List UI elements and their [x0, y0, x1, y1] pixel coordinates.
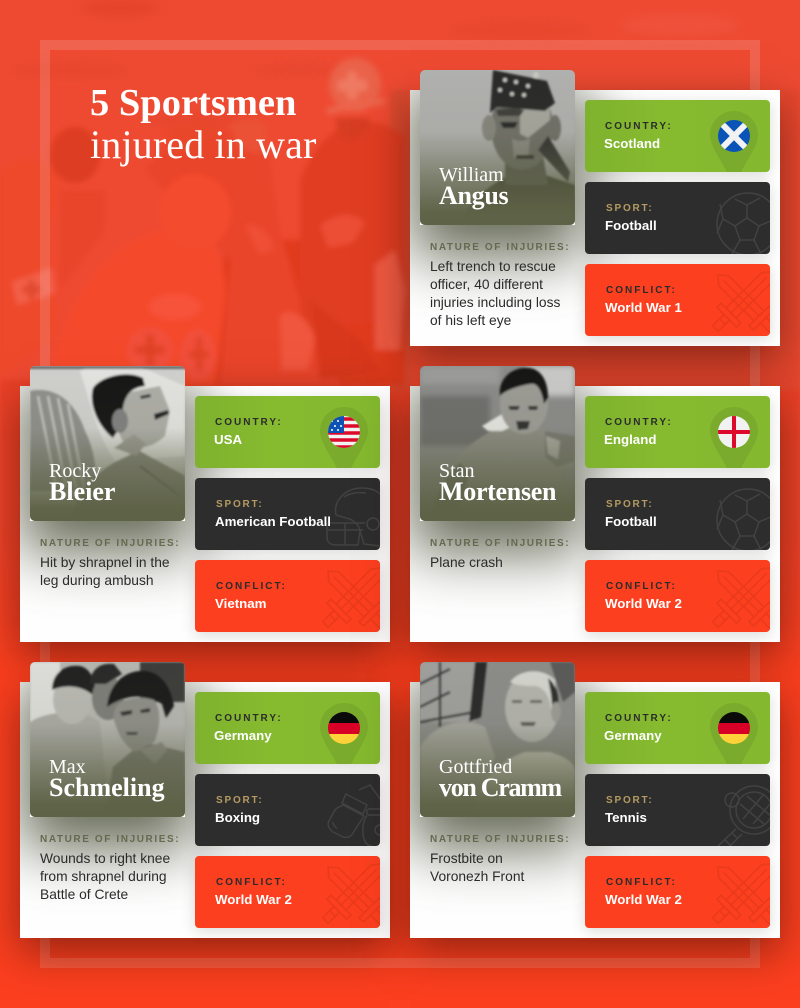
photo: William Angus	[420, 70, 575, 225]
label: SPORT:	[216, 795, 263, 806]
value: Tennis	[605, 810, 647, 825]
tile: country	[195, 692, 380, 764]
tile: conflict	[585, 264, 770, 336]
injuries label: NATURE OF INJURIES:	[40, 538, 180, 549]
label: CONFLICT:	[606, 877, 677, 888]
label: COUNTRY:	[215, 713, 283, 724]
injuries text: Wounds to right knee	[40, 851, 170, 866]
title: injured in war	[90, 122, 316, 167]
name	[439, 756, 562, 802]
card: Stan Mortensen	[378, 366, 800, 682]
value: Scotland	[604, 136, 660, 151]
lower scene base	[0, 380, 800, 700]
name: von Cramm	[439, 773, 561, 802]
icon: England flag pin	[710, 407, 758, 468]
ground	[215, 240, 405, 385]
injuries text: Plane crash	[430, 555, 503, 570]
label: COUNTRY:	[605, 417, 673, 428]
value: Germany	[214, 728, 272, 743]
label: CONFLICT:	[216, 581, 287, 592]
icon: Scotland flag pin	[710, 111, 758, 172]
icon: USA flag pin	[320, 407, 368, 468]
injuries label: NATURE OF INJURIES:	[430, 242, 570, 253]
value: Football	[605, 514, 657, 529]
name: Angus	[439, 181, 508, 210]
name: Stan	[439, 460, 475, 482]
left man	[0, 159, 60, 380]
icon: crossed swords	[712, 272, 770, 334]
value: American Football	[215, 514, 331, 529]
value: World War 2	[605, 892, 682, 907]
name	[49, 460, 115, 506]
name: Bleier	[49, 477, 115, 506]
tile: country	[195, 396, 380, 468]
injuries text	[40, 555, 170, 588]
photo: Max Schmeling	[30, 662, 185, 817]
tile: conflict	[195, 856, 380, 928]
icon: crossed swords	[712, 864, 770, 926]
center soldier	[145, 130, 340, 385]
value: Vietnam	[215, 596, 266, 611]
name: William	[439, 164, 504, 186]
card: Gottfried von Cramm	[378, 662, 800, 982]
name: Gottfried	[439, 756, 512, 778]
icon: boxing gloves	[328, 784, 380, 846]
label: COUNTRY:	[605, 713, 673, 724]
card: Rocky Bleier	[0, 366, 413, 682]
label: SPORT:	[606, 203, 653, 214]
tile: country	[585, 692, 770, 764]
injuries text: leg during ambush	[40, 573, 154, 588]
label: COUNTRY:	[215, 417, 283, 428]
tile: sport	[195, 774, 380, 846]
label: SPORT:	[216, 499, 263, 510]
photo: Rocky Bleier	[30, 366, 185, 521]
name	[439, 460, 556, 506]
injuries text: of his left eye	[430, 313, 511, 328]
tile: sport	[195, 478, 380, 550]
icon: Germany flag pin	[320, 703, 368, 764]
label: SPORT:	[606, 795, 653, 806]
icon: football	[716, 488, 770, 550]
background photo: medics treating a soldier	[0, 0, 800, 590]
photo: Gottfried von Cramm	[420, 662, 575, 817]
injuries text: Left trench to rescue	[430, 259, 556, 274]
injuries text	[430, 259, 560, 328]
label: CONFLICT:	[606, 285, 677, 296]
value: World War 2	[215, 892, 292, 907]
hands and lower right	[280, 313, 315, 370]
icon: crossed swords	[322, 568, 380, 630]
icon: crossed swords	[322, 864, 380, 926]
icon: football	[716, 192, 770, 254]
patches	[149, 294, 201, 320]
icon: tennis racket	[717, 785, 770, 846]
injuries text: injuries including loss	[430, 295, 560, 310]
tile: sport	[585, 478, 770, 550]
injuries text: from shrapnel during	[40, 869, 167, 884]
injuries text	[40, 851, 170, 902]
name	[439, 164, 508, 210]
injuries label: NATURE OF INJURIES:	[430, 538, 570, 549]
icon: Germany flag pin	[710, 703, 758, 764]
icon: football helmet	[326, 487, 380, 547]
tile: conflict	[195, 560, 380, 632]
value: Football	[605, 218, 657, 233]
name: Schmeling	[49, 773, 165, 802]
armband	[12, 268, 55, 305]
label: SPORT:	[606, 499, 653, 510]
tile: country	[585, 100, 770, 172]
value: England	[604, 432, 656, 447]
label: COUNTRY:	[605, 121, 673, 132]
injuries label: NATURE OF INJURIES:	[430, 834, 570, 845]
photo: Stan Mortensen	[420, 366, 575, 521]
name: Mortensen	[439, 477, 556, 506]
injuries text: Voronezh Front	[430, 869, 524, 884]
title	[90, 82, 316, 167]
value: World War 1	[605, 300, 682, 315]
tile: sport	[585, 182, 770, 254]
name: Max	[49, 756, 86, 778]
name	[49, 756, 165, 802]
injuries label: NATURE OF INJURIES:	[40, 834, 180, 845]
card: William Angus	[380, 70, 800, 386]
helmet	[329, 58, 381, 112]
injuries text: Frostbite on	[430, 851, 503, 866]
right soldier	[300, 122, 405, 330]
injuries text: officer, 40 different	[430, 277, 543, 292]
value: Boxing	[215, 810, 260, 825]
back man	[50, 229, 226, 385]
tile: country	[585, 396, 770, 468]
title: 5 Sportsmen	[90, 82, 296, 124]
value: USA	[214, 432, 242, 447]
value: Germany	[604, 728, 662, 743]
card: Max Schmeling	[0, 662, 414, 982]
tile: sport	[585, 774, 770, 846]
label: CONFLICT:	[606, 581, 677, 592]
tile: conflict	[585, 856, 770, 928]
value: World War 2	[605, 596, 682, 611]
injuries text	[430, 851, 524, 884]
icon: crossed swords	[712, 568, 770, 630]
injuries text: Battle of Crete	[40, 887, 128, 902]
name: Rocky	[49, 460, 101, 482]
injuries text: Hit by shrapnel in the	[40, 555, 170, 570]
tile: conflict	[585, 560, 770, 632]
label: CONFLICT:	[216, 877, 287, 888]
